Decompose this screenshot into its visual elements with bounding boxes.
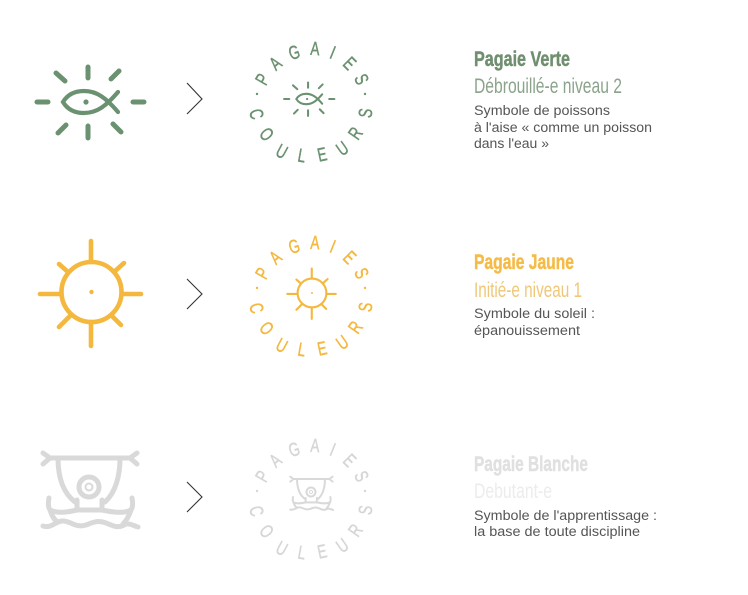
circular text: S (350, 468, 373, 485)
circular text: R (344, 317, 367, 338)
circular text: R (344, 520, 367, 541)
circular text: C (245, 504, 268, 519)
circular text: E (339, 53, 360, 74)
circular text (245, 232, 377, 361)
text block: blanche: Pagaie Blanche (474, 453, 588, 476)
circular text: S (354, 301, 377, 313)
text block: jaune: épanouissement (474, 323, 580, 338)
icon: sun (40, 241, 141, 346)
circular text: G (286, 235, 303, 259)
circular text: A (265, 246, 286, 269)
text block: jaune (474, 251, 595, 338)
text block: jaune: Initié-e niveau 1 (474, 279, 582, 302)
circular text: U (272, 537, 291, 561)
circular text: C (245, 107, 268, 122)
circular text: A (310, 232, 320, 254)
circular text: E (339, 450, 360, 471)
circular text: S (354, 504, 377, 516)
circular text: A (310, 38, 320, 60)
circular text: P (251, 467, 274, 486)
text block: blanche: la base de toute discipline (474, 524, 640, 539)
circular text: R (344, 123, 367, 144)
row: pagaie verte (37, 38, 652, 167)
circular text: S (354, 107, 377, 119)
circular text: A (265, 52, 286, 75)
text block: jaune: Pagaie Jaune (474, 251, 574, 274)
circular text: E (315, 143, 329, 166)
text block: blanche (474, 453, 657, 539)
circular text: I (327, 236, 339, 257)
circular text: L (296, 144, 308, 167)
row: pagaie blanche (43, 435, 657, 564)
text block: verte (474, 48, 652, 151)
circular text: S (350, 71, 373, 88)
circular text: U (272, 140, 291, 164)
text block: verte: à l'aise « comme un poisson (474, 120, 652, 135)
circular text: I (327, 42, 339, 63)
circular text: O (255, 520, 278, 543)
arrow (187, 279, 202, 309)
text block: verte: Débrouillé-e niveau 2 (474, 75, 622, 98)
circular text: O (255, 317, 278, 340)
circular text: S (350, 265, 373, 282)
text block: verte: dans l'eau » (474, 136, 549, 151)
circular text: U (272, 334, 291, 358)
text block: verte: Pagaie Verte (474, 48, 570, 71)
circular text: C (245, 301, 268, 316)
circular text (245, 435, 377, 564)
text block: verte: Symbole de poissons (474, 103, 610, 118)
icon: small fish with rays (284, 83, 334, 116)
circular text: U (332, 137, 353, 160)
text block: blanche: Debutant-e (474, 480, 552, 503)
circular text: E (315, 337, 329, 360)
logo: grey badge (245, 435, 377, 564)
text block: blanche: Symbole de l'apprentissage : (474, 508, 657, 523)
icon: small paddler in boat (290, 477, 333, 510)
arrow (187, 482, 202, 512)
arrow (187, 83, 202, 114)
circular text: U (332, 534, 353, 557)
logo: green badge (245, 38, 377, 167)
circular text: U (332, 331, 353, 354)
circular text: L (296, 338, 308, 361)
logo: yellow badge (245, 232, 377, 361)
circular text: E (315, 540, 329, 563)
circular text: I (327, 439, 339, 460)
circular text: G (286, 41, 303, 65)
circular text: L (296, 541, 308, 564)
circular text: P (251, 264, 274, 283)
circular text: E (339, 247, 360, 268)
circular text: P (251, 70, 274, 89)
text block: jaune: Symbole du soleil : (474, 306, 595, 321)
row: pagaie jaune (40, 232, 595, 361)
icon: small sun (287, 269, 336, 319)
icon: paddler in boat (43, 453, 138, 527)
circular text: A (310, 435, 320, 457)
icon: fish with rays (37, 67, 144, 138)
circular text: G (286, 438, 303, 462)
circular text (245, 38, 377, 167)
circular text: A (265, 449, 286, 472)
circular text: O (255, 123, 278, 146)
